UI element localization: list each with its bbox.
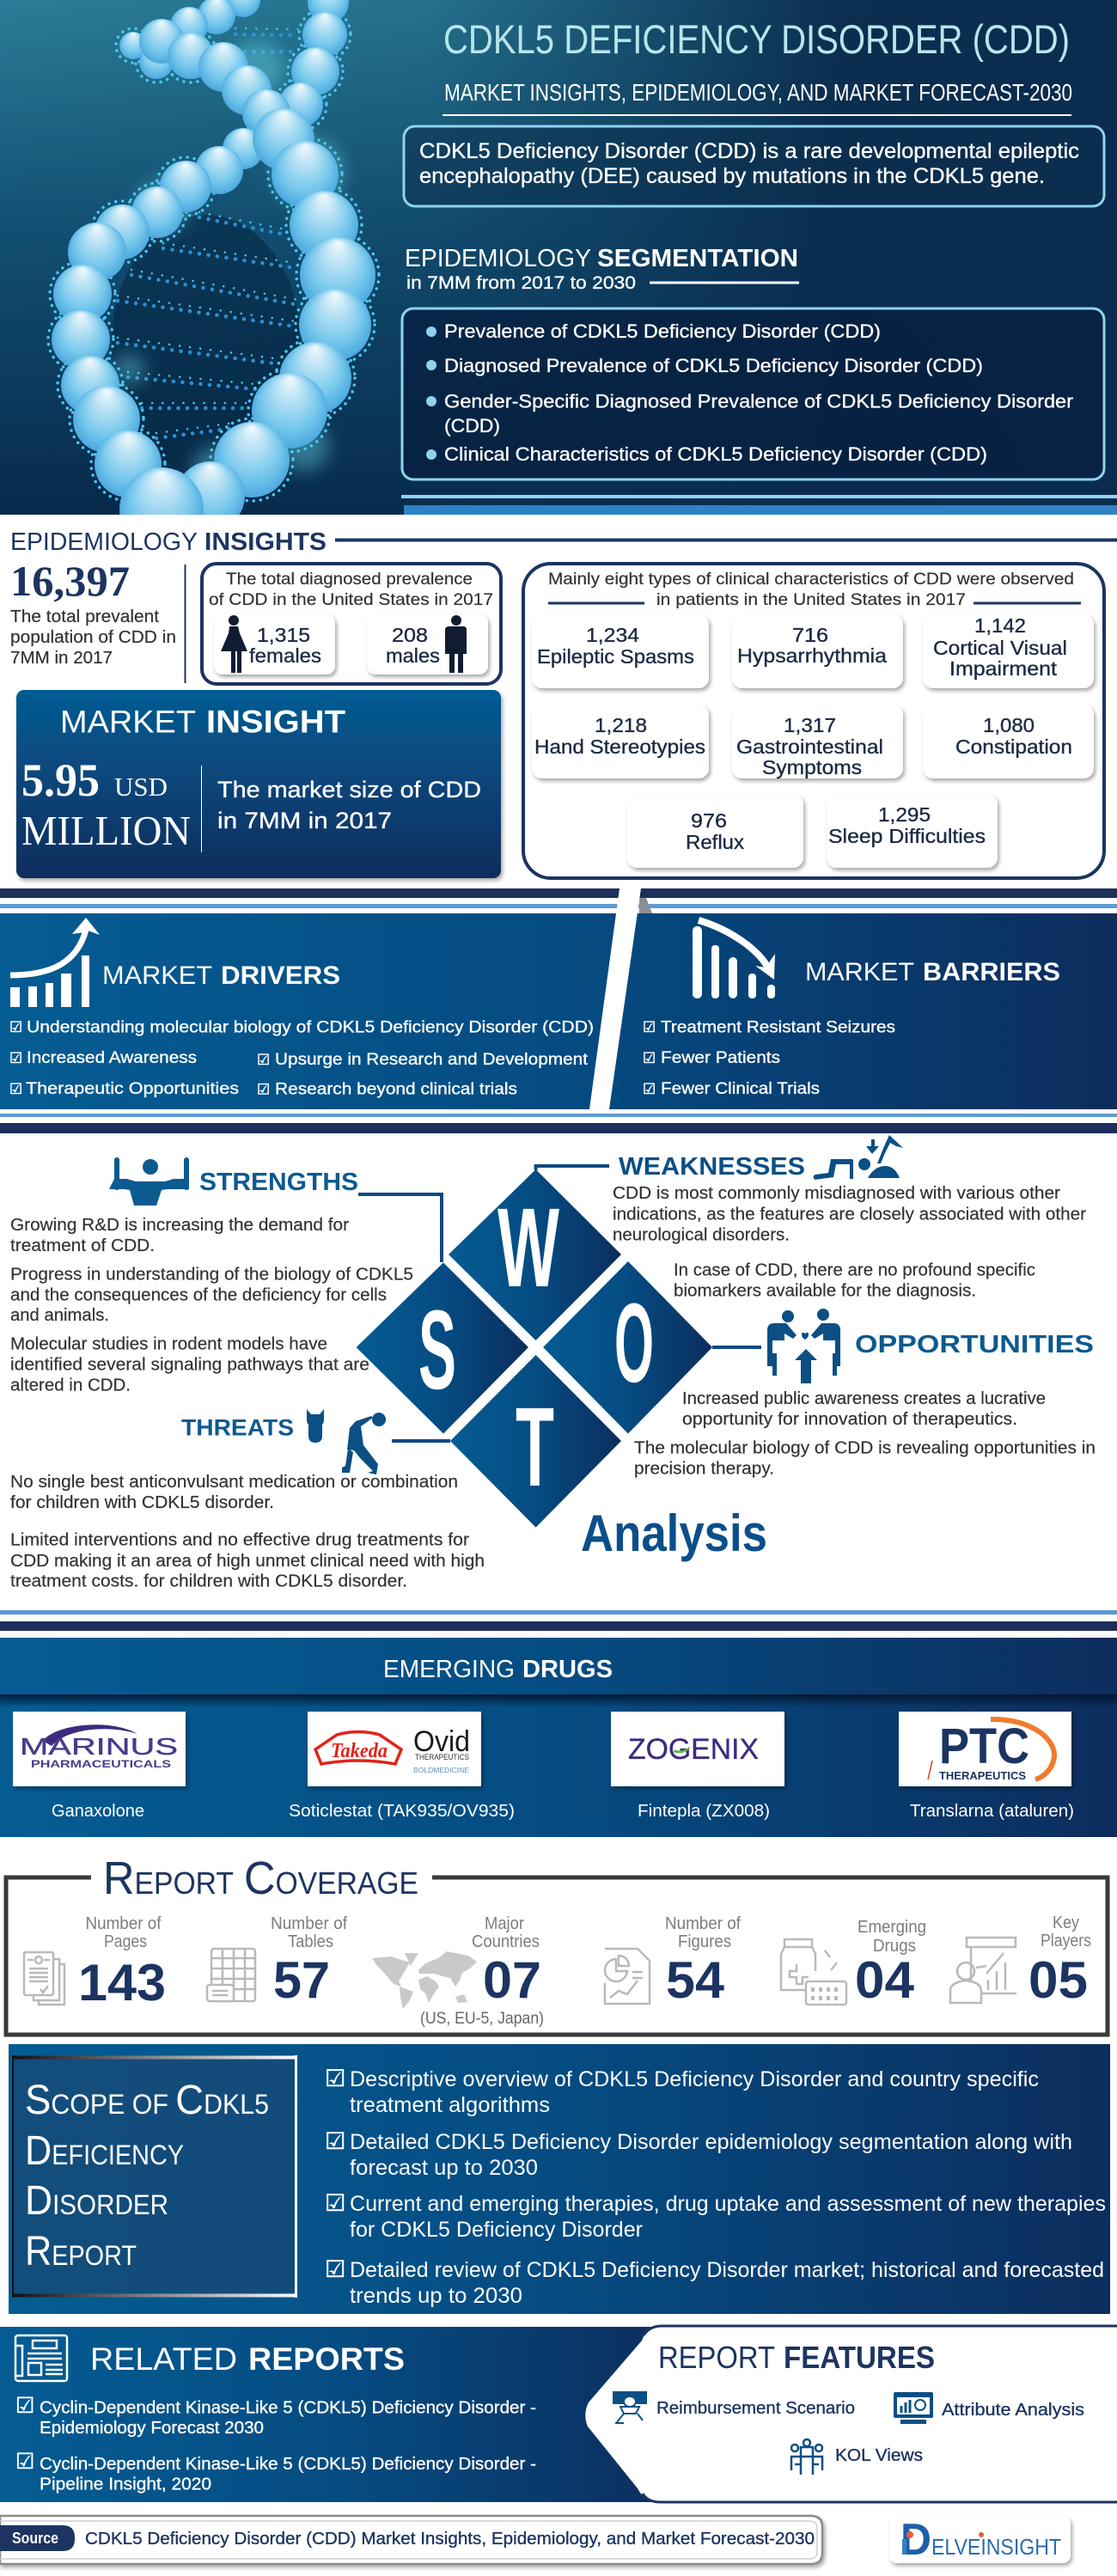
- feature: KOL views: KOL Views: [835, 2446, 923, 2465]
- heading: report features: REPORT: [658, 2340, 775, 2375]
- panel: market insight: USD: [114, 772, 168, 802]
- stat: number of figures: Number of: [665, 1914, 741, 1933]
- drug names: Fintepla (ZX008): [638, 1802, 770, 1821]
- list: market drivers: Upsurge in Research and Development: [275, 1050, 589, 1069]
- stat: number of tables: Tables: [288, 1932, 333, 1951]
- panel: market insight: MILLION: [21, 807, 191, 854]
- stat: reflux: 976: [691, 809, 727, 832]
- stat: hypsarrhythmia: [737, 624, 887, 667]
- heading: epidemiology insights: INSIGHTS: [204, 528, 327, 556]
- panel: segmentation list: Gender-Specific Diagnosed Prevalence of CDKL5 Deficiency Disorder: [444, 390, 1074, 412]
- list: market barriers: Fewer Patients: [661, 1048, 780, 1067]
- card: males: 208: [392, 624, 428, 646]
- text: opportunities: opportunity for innovation of therapeutics.: [682, 1410, 1017, 1429]
- logo: PTC Therapeutics: [899, 1712, 1071, 1786]
- scope title box: REPORT: [25, 2229, 137, 2274]
- stat: number of tables: [207, 1914, 347, 2009]
- icon: report document: [15, 2335, 67, 2381]
- text: strengths: altered in CDD.: [10, 1376, 131, 1395]
- text: opportunities: [634, 1389, 1096, 1479]
- scope title box: DISORDER: [25, 2178, 168, 2224]
- stat: sleep difficulties: 1,295: [878, 803, 931, 826]
- feature: attribute analysis: [894, 2392, 1084, 2424]
- text: weaknesses: indications, as the features are closely associated with other: [613, 1205, 1086, 1224]
- logo: DelveInsight: [889, 2515, 1071, 2565]
- logo: Takeda and Ovid: THERAPEUTICS: [415, 1753, 469, 1761]
- logo: Zogenix: ZOGENIX: [628, 1733, 759, 1766]
- stat: epileptic spasms: 1,234: [586, 624, 639, 646]
- list: market drivers: Understanding molecular biology of CDKL5 Deficiency Disorder (CDD): [27, 1017, 594, 1036]
- panel: clinical characteristics: [523, 564, 1104, 878]
- stat: emerging drugs: Drugs: [873, 1937, 916, 1956]
- chart: SWOT diamonds: [357, 1169, 712, 1528]
- stat: number of pages: Number of: [86, 1914, 162, 1933]
- list: market drivers: [9, 1017, 594, 1098]
- stat: emerging drugs: [781, 1918, 926, 2009]
- list: report scope: ☑: [325, 2190, 345, 2217]
- heading: market drivers: DRIVERS: [221, 961, 340, 990]
- list: report scope: Detailed review of CDKL5 Deficiency Disorder market; historical and forecasted: [350, 2258, 1104, 2282]
- panel: clinical characteristics: Mainly eight types of clinical characteristics of CDD were observed: [548, 570, 1074, 589]
- source bar: Source: [12, 2530, 58, 2547]
- list: report scope: [325, 2066, 1106, 2308]
- text: threats: No single best anticonvulsant medication or combination: [10, 1473, 458, 1492]
- card: males: males: [386, 644, 440, 667]
- stat: major countries: Countries: [472, 1932, 540, 1951]
- feature: attribute analysis: Attribute Analysis: [942, 2401, 1084, 2420]
- stat: hand stereotypies: 1,218: [595, 714, 647, 736]
- heading: report coverage: [103, 1853, 418, 1904]
- heading: report coverage: COVERAGE: [244, 1853, 418, 1904]
- feature: KOL views: [791, 2439, 923, 2475]
- list: related reports: [15, 2393, 536, 2494]
- scope title box: SCOPE OF CDKL5: [25, 2078, 269, 2123]
- stat: reflux: Reflux: [686, 831, 745, 853]
- heading: report features: [658, 2340, 935, 2375]
- list: report scope: treatment algorithms: [350, 2093, 550, 2117]
- text: strengths: treatment of CDD.: [10, 1236, 155, 1255]
- heading: market barriers: [805, 958, 1060, 986]
- heading: threats: THREATS: [181, 1414, 294, 1440]
- stat: number of tables: 57: [273, 1951, 330, 2009]
- icon: opportunities figures: [767, 1309, 840, 1383]
- panel: market insight: in 7MM in 2017: [217, 808, 392, 833]
- logo: Takeda and Ovid: Takeda: [331, 1740, 388, 1762]
- stat: cortical visual impairment: [933, 614, 1067, 680]
- list: related reports: Epidemiology Forecast 2030: [40, 2419, 264, 2438]
- stat: sleep difficulties: Sleep Difficulties: [828, 825, 986, 847]
- stat: constipation: 1,080: [983, 714, 1035, 736]
- logo: Takeda and Ovid: BOLDMEDICINE: [413, 1767, 469, 1774]
- panel: diagnosed prevalence by gender: of CDD in the United States in 2017: [209, 590, 493, 609]
- heading: market barriers: BARRIERS: [923, 958, 1060, 986]
- stat: reflux: [686, 809, 745, 853]
- intro callout: CDKL5 Deficiency Disorder (CDD) is a rare developmental epileptic: [419, 139, 1079, 163]
- stat: constipation: Constipation: [955, 736, 1072, 758]
- panel: market drivers and barriers: [0, 888, 1117, 1133]
- text: threats: treatment costs. for children with CDKL5 disorder.: [10, 1572, 407, 1591]
- stat: total prevalent population: population of CDD in: [10, 628, 176, 647]
- logo: Marinus: PHARMACEUTICALS: [31, 1758, 171, 1770]
- list: market drivers: Therapeutic Opportunities: [26, 1079, 239, 1098]
- panel: market insight: The market size of CDD: [217, 777, 481, 803]
- stat: total prevalent population: 16,397: [10, 557, 130, 605]
- list: report scope: ☑: [325, 2066, 345, 2092]
- logo: Takeda and Ovid: Ovid: [413, 1725, 470, 1758]
- text: strengths: identified several signaling pathways that are: [10, 1356, 369, 1375]
- panel: market insight: 5.95: [21, 754, 100, 806]
- heading: epidemiology segmentation: [405, 245, 799, 293]
- list: report scope: ☑: [325, 2256, 345, 2283]
- stat: total prevalent population: The total prevalent: [10, 607, 159, 626]
- heading: report features: FEATURES: [784, 2340, 935, 2375]
- heading: epidemiology segmentation: SEGMENTATION: [597, 245, 798, 272]
- stat: total prevalent population: [10, 557, 176, 668]
- list: related reports: Cyclin-Dependent Kinase-Like 5 (CDKL5) Deficiency Disorder -: [40, 2399, 536, 2418]
- panel: diagnosed prevalence by gender: The total diagnosed prevalence: [226, 570, 473, 589]
- chart: SWOT diamonds: O: [614, 1279, 654, 1406]
- panel: related reports: [0, 2327, 679, 2502]
- stat: cortical visual impairment: 1,142: [974, 614, 1026, 637]
- text: strengths: Growing R&D is increasing the demand for: [10, 1216, 349, 1235]
- stat: hand stereotypies: [534, 714, 705, 758]
- list: market drivers: Research beyond clinical trials: [275, 1079, 517, 1098]
- logo: DelveInsight: D: [900, 2515, 931, 2565]
- heading: emerging drugs: [383, 1656, 613, 1683]
- panel: market insight: MARKET: [60, 705, 196, 739]
- panel: segmentation list: [402, 308, 1104, 479]
- panel: emerging drugs: [0, 1638, 1117, 1837]
- logo: PTC Therapeutics: PTC: [939, 1718, 1029, 1774]
- stat: emerging drugs: Emerging: [858, 1918, 926, 1937]
- heading: epidemiology insights: EPIDEMIOLOGY: [10, 528, 198, 556]
- text: weaknesses: CDD is most commonly misdiagnosed with various other: [613, 1184, 1060, 1203]
- icon: falling bars: [693, 920, 775, 998]
- heading: epidemiology segmentation: in 7MM from 2017 to 2030: [406, 273, 636, 293]
- heading: related reports: [90, 2341, 405, 2377]
- panel: market insight: [16, 690, 501, 878]
- heading: epidemiology segmentation: EPIDEMIOLOGY: [405, 245, 591, 272]
- list: report scope: Current and emerging therapies, drug uptake and assessment of new therapies: [350, 2192, 1106, 2216]
- list: market drivers: ☑: [257, 1052, 270, 1069]
- stat: key players: Players: [1041, 1932, 1091, 1950]
- list: market drivers: ☑: [257, 1081, 270, 1098]
- heading: strengths: STRENGTHS: [199, 1169, 358, 1196]
- drug names: Translarna (ataluren): [910, 1802, 1074, 1821]
- stat: constipation: [955, 714, 1072, 758]
- panel: segmentation list: (CDD): [444, 415, 500, 436]
- logo: Takeda and Ovid: [308, 1712, 481, 1786]
- text: weaknesses: In case of CDD, there are no profound specific: [674, 1261, 1035, 1280]
- list: report scope: trends up to 2030: [350, 2284, 522, 2308]
- panel: report coverage: [6, 1853, 1108, 2035]
- list: related reports: Pipeline Insight, 2020: [40, 2475, 211, 2494]
- list: market barriers: ☑: [643, 1019, 656, 1036]
- text: weaknesses: biomarkers available for the diagnosis.: [674, 1282, 976, 1301]
- list: report scope: forecast up to 2030: [350, 2156, 538, 2180]
- logo: Zogenix: [611, 1712, 784, 1786]
- list: report scope: Descriptive overview of CDKL5 Deficiency Disorder and country specific: [350, 2067, 1039, 2091]
- stat: gastrointestinal symptoms: [736, 714, 883, 778]
- stat: cortical visual impairment: Impairment: [949, 657, 1058, 680]
- list: market barriers: [643, 1017, 895, 1098]
- icon: DNA helix: [48, 0, 379, 552]
- chart: SWOT diamonds: S: [418, 1286, 456, 1413]
- stat: major countries: [372, 1914, 544, 2028]
- stat: gastrointestinal symptoms: Symptoms: [762, 756, 862, 778]
- list: market drivers: ☑: [9, 1081, 22, 1098]
- hero panel: [0, 0, 1117, 558]
- stat: epileptic spasms: [537, 624, 694, 668]
- text: strengths: [10, 1216, 413, 1395]
- scope title box: [12, 2055, 297, 2298]
- heading: emerging drugs: EMERGING: [383, 1656, 515, 1683]
- panel: segmentation list: Prevalence of CDKL5 Deficiency Disorder (CDD): [444, 320, 881, 342]
- stat: number of pages: 143: [78, 1954, 166, 2011]
- icon: weaknesses figure: [814, 1135, 903, 1180]
- stat: number of figures: 54: [666, 1951, 725, 2009]
- heading: report coverage: REPORT: [103, 1853, 234, 1904]
- text: threats: Limited interventions and no effective drug treatments for: [10, 1531, 469, 1550]
- list: market drivers: ☑: [9, 1050, 22, 1067]
- drug names: Ganaxolone: [52, 1802, 144, 1821]
- stat: number of tables: Number of: [271, 1914, 347, 1933]
- stat: key players: 05: [1028, 1951, 1088, 2009]
- stat: number of figures: [605, 1914, 741, 2009]
- list: related reports: Cyclin-Dependent Kinase-Like 5 (CDKL5) Deficiency Disorder -: [40, 2455, 536, 2474]
- list: market drivers: ☑: [9, 1019, 22, 1036]
- panel: report scope: [9, 2044, 1110, 2314]
- logo: Marinus: MARINUS: [20, 1733, 178, 1760]
- text: opportunities: precision therapy.: [634, 1460, 774, 1479]
- panel: market insight: INSIGHT: [206, 705, 345, 739]
- icon: rising bars: [10, 918, 100, 1007]
- stat: major countries: 07: [483, 1951, 541, 2009]
- feature: reimbursement scenario: Reimbursement Scenario: [656, 2399, 855, 2418]
- list: market barriers: Fewer Clinical Trials: [661, 1079, 820, 1098]
- heading: weaknesses: WEAKNESSES: [619, 1153, 805, 1181]
- list: market barriers: ☑: [643, 1081, 656, 1098]
- stat: hand stereotypies: Hand Stereotypies: [534, 736, 705, 758]
- stat: cortical visual impairment: Cortical Visual: [933, 637, 1067, 659]
- list: related reports: ☑: [15, 2449, 34, 2474]
- intro callout: [404, 126, 1104, 206]
- list: market barriers: ☑: [643, 1050, 656, 1067]
- card: females: 1,315: [257, 624, 310, 646]
- source bar: CDKL5 Deficiency Disorder (CDD) Market Insights, Epidemiology, and Market Forecast-2030: [85, 2529, 815, 2549]
- heading: related reports: REPORTS: [248, 2341, 405, 2377]
- stat: gastrointestinal symptoms: 1,317: [784, 714, 836, 736]
- heading: market drivers: [102, 961, 340, 990]
- card: females: females: [249, 644, 321, 667]
- logo: DelveInsight: ELVEINSIGHT: [931, 2534, 1061, 2560]
- drug names: Soticlestat (TAK935/OV935): [289, 1802, 515, 1821]
- stat: sleep difficulties: [828, 803, 986, 847]
- drug names: [52, 1802, 1074, 1821]
- heading: emerging drugs: DRUGS: [522, 1656, 613, 1683]
- text: weaknesses: [613, 1184, 1086, 1301]
- stat: key players: [950, 1914, 1091, 2009]
- stat: major countries: Major: [485, 1914, 524, 1933]
- feature: reimbursement scenario: [613, 2392, 855, 2423]
- icon: crouching figure: [342, 1413, 386, 1474]
- heading: market drivers: MARKET: [102, 961, 212, 990]
- text: strengths: and the consequences of the deficiency for cells: [10, 1285, 387, 1304]
- heading: epidemiology insights: [10, 528, 1117, 556]
- panel: diagnosed prevalence by gender: [202, 564, 501, 684]
- stat: emerging drugs: 04: [855, 1951, 915, 2009]
- heading: opportunities: OPPORTUNITIES: [855, 1331, 1094, 1358]
- stat: gastrointestinal symptoms: Gastrointestinal: [736, 736, 883, 758]
- list: report scope: ☑: [325, 2128, 345, 2155]
- stat: major countries: (US, EU-5, Japan): [420, 2010, 544, 2028]
- list: market drivers: Increased Awareness: [27, 1048, 197, 1067]
- panel: segmentation list: Diagnosed Prevalence of CDKL5 Deficiency Disorder (CDD): [444, 355, 983, 376]
- text: threats: CDD making it an area of high unmet clinical need with high: [10, 1552, 485, 1571]
- text: threats: [10, 1473, 485, 1591]
- heading: analysis: Analysis: [581, 1505, 767, 1562]
- text: strengths: Molecular studies in rodent models have: [10, 1335, 327, 1354]
- stat: number of pages: [24, 1914, 166, 2011]
- stat: hypsarrhythmia: 716: [792, 624, 828, 646]
- card: males: [367, 614, 488, 675]
- list: report scope: Detailed CDKL5 Deficiency Disorder epidemiology segmentation along with: [350, 2130, 1072, 2154]
- panel: clinical characteristics: in patients in the United States in 2017: [656, 590, 966, 609]
- text: strengths: Progress in understanding of the biology of CDKL5: [10, 1265, 413, 1284]
- text: strengths: and animals.: [10, 1306, 109, 1325]
- list: report scope: for CDKL5 Deficiency Disorder: [350, 2218, 643, 2242]
- heading: related reports: RELATED: [90, 2341, 237, 2377]
- stat: epileptic spasms: Epileptic Spasms: [537, 645, 694, 668]
- stat: number of pages: Pages: [104, 1932, 147, 1951]
- panel: SWOT analysis: [10, 1135, 1096, 1591]
- intro callout: encephalopathy (DEE) caused by mutations in the CDKL5 gene.: [419, 164, 1045, 188]
- chart: SWOT diamonds: T: [516, 1383, 554, 1510]
- logo: Marinus: [13, 1712, 186, 1786]
- icon: strengths muscle figure: [109, 1157, 189, 1206]
- text: weaknesses: neurological disorders.: [613, 1225, 790, 1244]
- stat: key players: Key: [1053, 1914, 1079, 1932]
- stat: number of figures: Figures: [678, 1932, 731, 1951]
- text: opportunities: Increased public awareness creates a lucrative: [682, 1389, 1046, 1408]
- list: market barriers: Treatment Resistant Seizures: [661, 1017, 895, 1036]
- stat: total prevalent population: 7MM in 2017: [10, 649, 113, 668]
- connectors: [358, 1166, 761, 1441]
- card: females: [214, 614, 335, 675]
- logo: PTC Therapeutics: THERAPEUTICS: [939, 1769, 1026, 1782]
- icon: bomb: [307, 1409, 324, 1443]
- list: related reports: ☑: [15, 2393, 34, 2418]
- text: opportunities: The molecular biology of CDD is revealing opportunities in: [634, 1438, 1096, 1457]
- text: threats: for children with CDKL5 disorder.: [10, 1493, 274, 1512]
- panel: segmentation list: Clinical Characteristics of CDKL5 Deficiency Disorder (CDD): [444, 443, 987, 465]
- chart: SWOT diamonds: W: [497, 1184, 559, 1310]
- stat: hypsarrhythmia: Hypsarrhythmia: [737, 644, 887, 667]
- panel: report features: [585, 2326, 1117, 2502]
- source bar: [0, 2516, 822, 2564]
- heading: market barriers: MARKET: [805, 958, 914, 986]
- scope title box: DEFICIENCY: [25, 2128, 184, 2174]
